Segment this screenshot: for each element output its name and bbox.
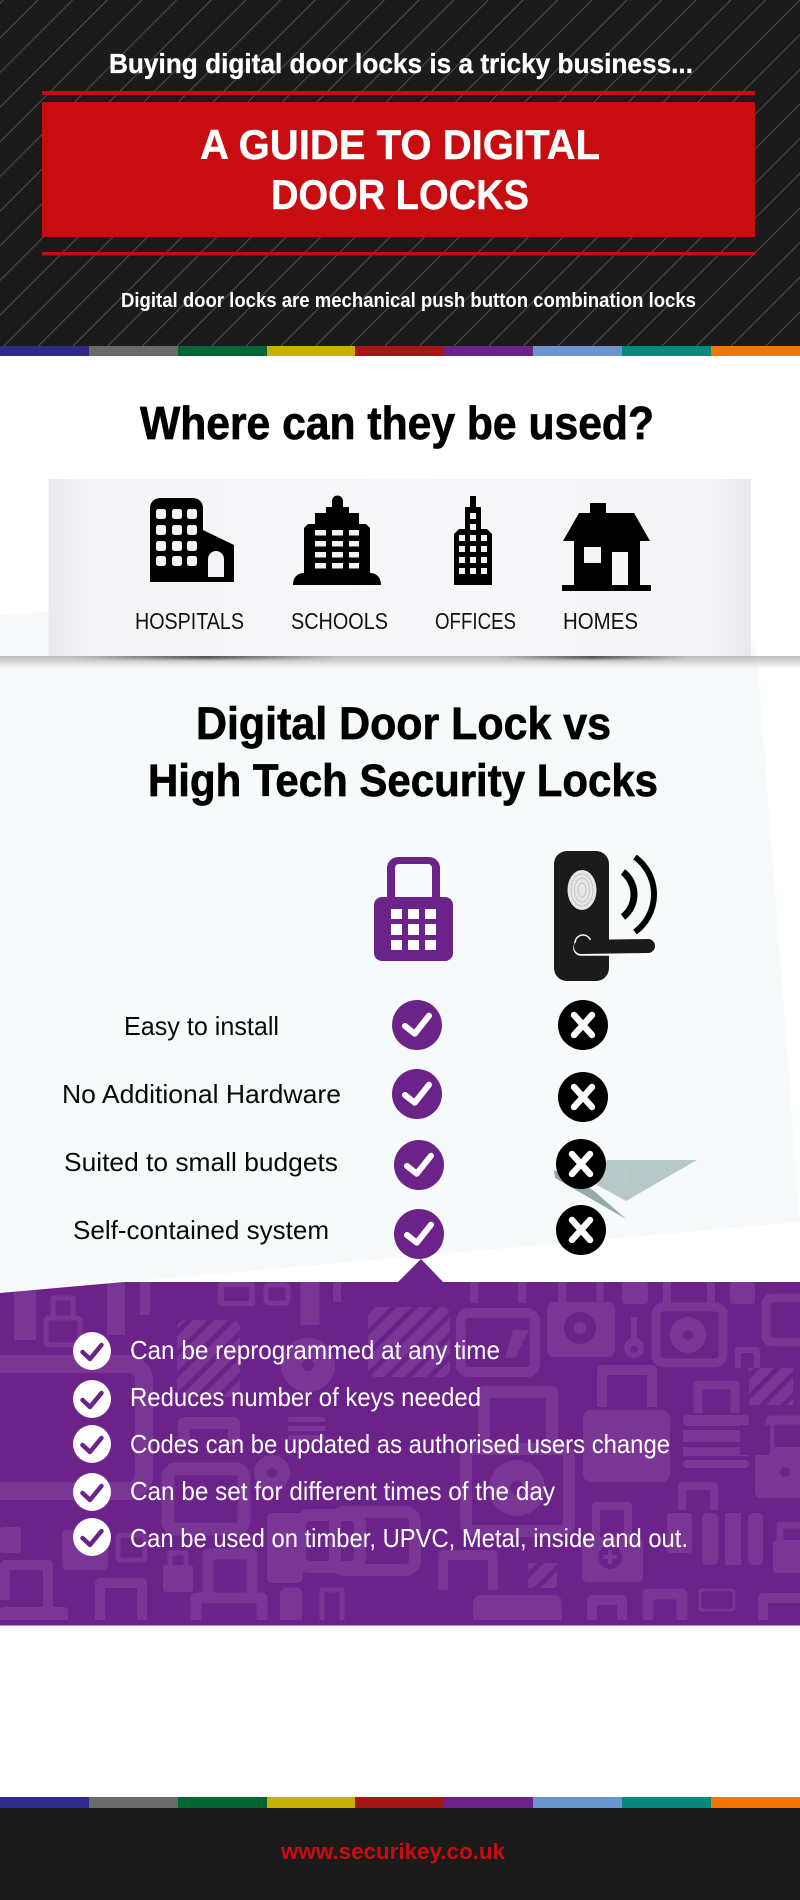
panel: where they can be used — [48, 479, 751, 656]
purple check column — [392, 1000, 444, 1259]
colour stripe bottom — [0, 1797, 800, 1808]
stray grey shape — [554, 1160, 697, 1219]
label: homes: HOMES — [563, 608, 638, 634]
list item 5: Can be used on timber, UPVC, Metal, inside and out. — [130, 1523, 688, 1553]
label: offices: OFFICES — [435, 608, 516, 634]
heading: where can they be used: Where can they be used? — [140, 397, 654, 449]
pale background shape — [0, 612, 800, 1293]
list item 3: Codes can be updated as authorised users change — [130, 1429, 670, 1459]
lock pattern background — [0, 1282, 800, 1627]
header description: Digital door locks are mechanical push button combination locks — [121, 290, 696, 312]
colour stripe top — [0, 346, 800, 356]
heading: digital door lock vs high tech: High Tech Security Locks — [148, 755, 658, 806]
arrow: purple pointer triangle — [397, 1259, 444, 1283]
list item 1 — [73, 1332, 500, 1370]
icon: home — [562, 503, 651, 591]
table row labels — [62, 1011, 341, 1245]
icon: high tech fingerprint lock — [554, 851, 654, 981]
list item 5 — [73, 1518, 688, 1556]
label: schools: SCHOOLS — [291, 608, 388, 634]
black cross column — [556, 1000, 608, 1255]
icon: digital keypad padlock — [374, 857, 453, 961]
title banner — [42, 91, 755, 256]
table row labels: Suited to small budgets — [64, 1147, 338, 1177]
list item 2 — [73, 1380, 481, 1418]
intro line: Buying digital door locks is a tricky business... — [109, 48, 693, 79]
list item 1: Can be reprogrammed at any time — [130, 1335, 500, 1365]
footer panel — [0, 1808, 800, 1900]
list item 4: Can be set for different times of the day — [130, 1476, 555, 1506]
table row labels: Self-contained system — [73, 1215, 329, 1245]
icon: hospital — [150, 498, 234, 582]
list item 2: Reduces number of keys needed — [130, 1382, 481, 1412]
list item 4 — [73, 1473, 555, 1511]
icon: school — [293, 496, 381, 585]
footer website link: www.securikey.co.uk — [280, 1839, 506, 1864]
table row labels: No Additional Hardware — [62, 1079, 341, 1109]
benefits list — [73, 1332, 688, 1556]
header panel — [0, 0, 800, 346]
label: hospitals: HOSPITALS — [135, 608, 244, 634]
table row labels: Easy to install — [124, 1011, 279, 1041]
list item 3 — [73, 1425, 670, 1463]
panel shadow — [0, 656, 800, 668]
heading: digital door lock vs high tech — [148, 698, 658, 806]
heading: digital door lock vs high tech: Digital Door Lock vs — [196, 698, 611, 749]
title banner: DOOR LOCKS — [271, 171, 529, 218]
title banner: A GUIDE TO DIGITAL — [200, 121, 600, 168]
icon: office — [454, 496, 492, 585]
purple benefits panel — [0, 1282, 800, 1627]
